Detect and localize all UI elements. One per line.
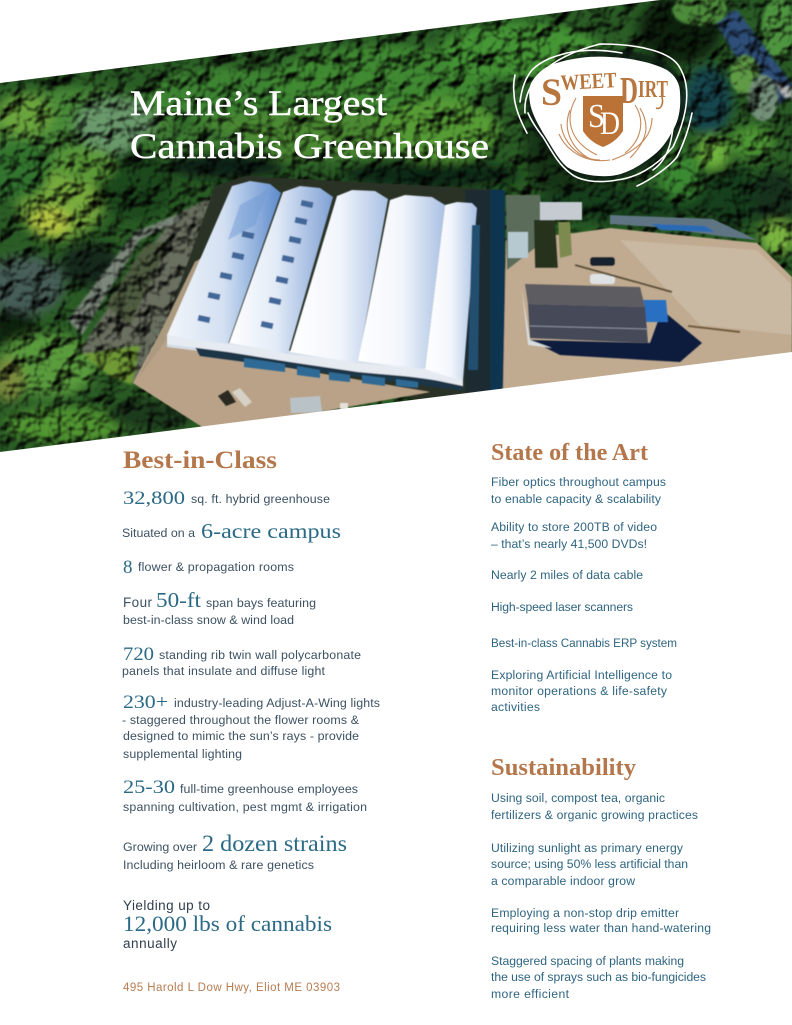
dirt yard around greenhouse bbox=[133, 176, 503, 432]
foliage relief texture bbox=[0, 0, 792, 460]
logo word: Sweet: WEET bbox=[560, 67, 617, 95]
item: drip emitter: Employing a non-stop drip emitter bbox=[491, 906, 679, 920]
stat: 6-acre campus: Situated on a bbox=[122, 526, 195, 540]
item: sunlight bbox=[491, 841, 688, 888]
greenhouse doors bbox=[244, 358, 418, 388]
stat: 230+ lights: 230+ bbox=[123, 693, 168, 713]
logo white badge bbox=[529, 57, 680, 176]
stat: 2 dozen strains: Growing over bbox=[123, 840, 197, 854]
stat: 720 panels: standing rib twin wall polycarbonate bbox=[159, 648, 361, 662]
stat: 25-30 employees: full-time greenhouse employees bbox=[180, 782, 358, 796]
item: staggered spacing: the use of sprays such as bio-fungicides bbox=[491, 970, 706, 984]
item: fiber optics: Fiber optics throughout campus bbox=[491, 475, 666, 489]
item: artificial intelligence bbox=[491, 668, 672, 714]
logo monogram: S bbox=[588, 98, 605, 135]
item: drip emitter bbox=[491, 906, 711, 935]
item: staggered spacing bbox=[491, 954, 706, 1001]
address: 495 Harold L Dow Hwy, Eliot ME 03903 bbox=[123, 982, 340, 994]
heading: State of the Art: State of the Art bbox=[491, 440, 648, 466]
item: artificial intelligence: monitor operations & life-safety bbox=[491, 684, 668, 698]
logo word: Dirt bbox=[620, 70, 668, 112]
stat: 50-ft span bays: Four bbox=[123, 595, 152, 610]
stat: 12,000 lbs bbox=[123, 898, 332, 951]
item: fiber optics bbox=[491, 475, 666, 506]
logo word: Sweet: S bbox=[541, 71, 562, 114]
stat: 12,000 lbs: 12,000 lbs of cannabis bbox=[123, 911, 332, 936]
road top right bbox=[672, 0, 792, 121]
pickup equipment in yard bbox=[218, 388, 348, 413]
greenhouse vents bbox=[198, 200, 313, 329]
title: Maine’s Largest bbox=[130, 83, 387, 123]
stat: 25-30 employees: spanning cultivation, pest mgmt & irrigation bbox=[123, 800, 367, 814]
title: Cannabis Greenhouse bbox=[130, 126, 489, 166]
logo shield bbox=[583, 96, 623, 147]
stat: 2 dozen strains: 2 dozen strains bbox=[202, 831, 347, 856]
item: staggered spacing: Staggered spacing of plants making bbox=[491, 954, 684, 968]
stat: 230+ lights: industry-leading Adjust-A-Wing lights bbox=[174, 696, 380, 710]
item: laser scanners: High-speed laser scanners bbox=[491, 600, 633, 614]
stat: 720 panels: panels that insulate and diffuse light bbox=[122, 664, 326, 678]
item: organic soil: fertilizers & organic growing practices bbox=[491, 808, 698, 822]
stat: 2 dozen strains bbox=[123, 831, 347, 872]
logo word: Sweet bbox=[541, 67, 617, 114]
stat: 50-ft span bays: 50-ft bbox=[156, 588, 201, 612]
logo monogram: D bbox=[600, 106, 620, 142]
stat: 6-acre campus: 6-acre campus bbox=[201, 519, 341, 543]
left lawn strip bbox=[67, 196, 212, 386]
item: organic soil bbox=[491, 791, 698, 822]
item: drip emitter: requiring less water than hand-watering bbox=[491, 921, 711, 935]
stat: 230+ lights bbox=[122, 693, 380, 761]
logo outline strokes bbox=[514, 44, 692, 186]
stat: 8 rooms bbox=[123, 557, 294, 578]
item: video storage bbox=[491, 520, 657, 551]
stat: 230+ lights: designed to mimic the sun’s rays - provide bbox=[123, 729, 359, 743]
stat: 8 rooms: flower & propagation rooms bbox=[138, 560, 294, 574]
item: data cable: Nearly 2 miles of data cable bbox=[491, 568, 643, 582]
column: Best-in-Class bbox=[122, 447, 380, 994]
logo: Sweet Dirt bbox=[514, 44, 692, 186]
heading: Sustainability: Sustainability bbox=[491, 755, 636, 781]
item: artificial intelligence: Exploring Artificial Intelligence to bbox=[491, 668, 672, 682]
logo wordmark bbox=[541, 67, 668, 114]
hero aerial photo bbox=[0, 0, 792, 460]
stat: 32,800 sq ft: 32,800 bbox=[123, 489, 185, 509]
stat: 230+ lights: - staggered throughout the flower rooms & bbox=[122, 713, 360, 727]
item: organic soil: Using soil, compost tea, organic bbox=[491, 791, 665, 805]
stat: 50-ft span bays: best-in-class snow & wind load bbox=[123, 613, 294, 627]
logo word: Dirt: IRT bbox=[638, 77, 668, 103]
item: ERP system: Best-in-class Cannabis ERP system bbox=[491, 637, 677, 650]
stat: 50-ft span bays bbox=[123, 588, 316, 627]
stat: 720 panels: 720 bbox=[123, 645, 154, 665]
stat: 12,000 lbs: annually bbox=[123, 936, 177, 951]
column: State of the Art bbox=[491, 440, 677, 714]
item: sunlight: source; using 50% less artificial than bbox=[491, 857, 688, 871]
item: sunlight: a comparable indoor grow bbox=[491, 874, 635, 888]
stat: 2 dozen strains: Including heirloom & rare genetics bbox=[123, 858, 314, 872]
stat: 32,800 sq ft bbox=[123, 489, 330, 509]
stat: 50-ft span bays: span bays featuring bbox=[206, 596, 316, 610]
logo wood rings bbox=[559, 98, 652, 161]
stat: 25-30 employees: 25-30 bbox=[123, 778, 175, 798]
title bbox=[130, 83, 489, 166]
stat: 230+ lights: supplemental lighting bbox=[123, 747, 242, 761]
stat: 12,000 lbs: Yielding up to bbox=[123, 898, 210, 913]
item: video storage: Ability to store 200TB of video bbox=[491, 520, 657, 534]
stat: 8 rooms: 8 bbox=[123, 557, 132, 578]
item: fiber optics: to enable capacity & scalability bbox=[491, 492, 662, 506]
right dirt yard bbox=[490, 190, 792, 395]
heading: Best-in-Class: Best-in-Class bbox=[123, 447, 277, 474]
greenhouse bays bbox=[167, 181, 480, 391]
forest canopy bbox=[0, 0, 792, 443]
logo monogram bbox=[588, 98, 620, 142]
stat: 25-30 employees bbox=[123, 778, 367, 814]
stat: 6-acre campus bbox=[122, 519, 341, 543]
item: sunlight: Utilizing sunlight as primary energy bbox=[491, 841, 684, 855]
logo word: Dirt: D bbox=[620, 70, 638, 112]
logo shadow ring bbox=[527, 50, 686, 179]
item: video storage: – that’s nearly 41,500 DVDs! bbox=[491, 537, 647, 551]
item: artificial intelligence: activities bbox=[491, 700, 540, 714]
barn with solar roof bbox=[522, 284, 702, 362]
item: staggered spacing: more efficient bbox=[491, 987, 570, 1001]
stat: 32,800 sq ft: sq. ft. hybrid greenhouse bbox=[191, 492, 330, 506]
stat: 720 panels bbox=[122, 645, 361, 678]
column: Sustainability bbox=[491, 755, 711, 1001]
